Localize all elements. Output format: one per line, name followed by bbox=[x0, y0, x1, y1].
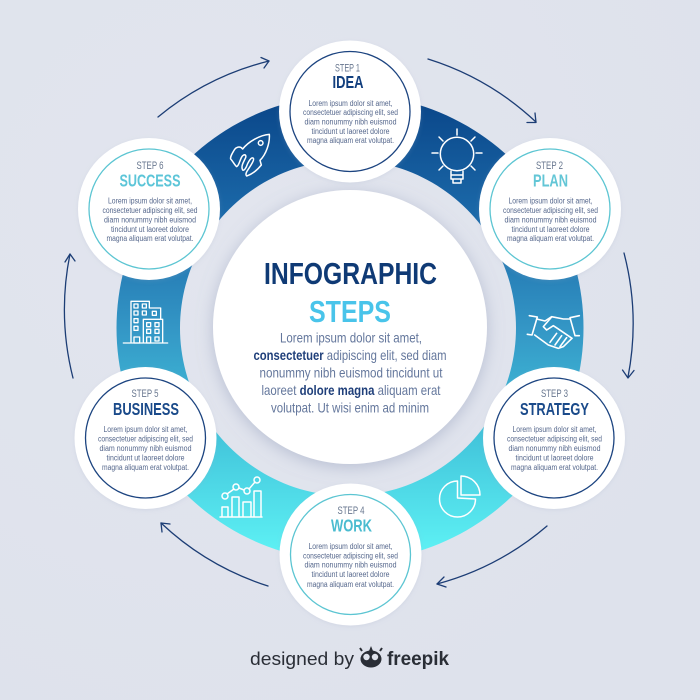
step 1: idea: consectetuer adipiscing elit, sed bbox=[303, 108, 398, 117]
icon: bar chart bbox=[220, 477, 262, 517]
footer credit bbox=[250, 646, 449, 670]
icon: building bbox=[123, 301, 168, 343]
step 2: plan: diam nonummy nibh euismod bbox=[504, 216, 596, 224]
step 1: idea: STEP 1 bbox=[335, 62, 360, 74]
step 5: business bbox=[74, 367, 216, 509]
icon: freepik logo bbox=[360, 646, 382, 668]
step 5: business: BUSINESS bbox=[113, 399, 179, 419]
step 2: plan: magna aliquam erat volutpat. bbox=[507, 234, 594, 243]
ring band bbox=[117, 94, 584, 561]
step 6: success bbox=[78, 138, 220, 280]
step 3: strategy: STEP 3 bbox=[541, 388, 568, 400]
step 3: strategy: diam nonummy nibh euismod bbox=[508, 444, 600, 453]
footer credit: designed by bbox=[250, 648, 355, 669]
center body text: Lorem ipsum dolor sit amet, bbox=[280, 330, 422, 346]
arrow: strategy to work bbox=[437, 526, 547, 587]
step 4: work: WORK bbox=[331, 516, 372, 536]
icon: rocket bbox=[231, 134, 269, 176]
step 1: idea: magna aliquam erat volutpat. bbox=[307, 136, 394, 145]
center body text bbox=[254, 330, 446, 416]
step 6: success: magna aliquam erat volutpat. bbox=[106, 234, 194, 243]
step 4: work bbox=[280, 484, 422, 626]
step 1: idea bbox=[279, 40, 421, 182]
step 3: strategy: magna aliquam erat volutpat. bbox=[511, 463, 598, 472]
arrow: work to business bbox=[161, 523, 268, 586]
step 5: business: tincidunt ut laoreet dolore bbox=[106, 454, 184, 462]
step 2: plan: consectetuer adipiscing elit, sed bbox=[503, 206, 598, 215]
step 3: strategy: tincidunt ut laoreet dolore bbox=[516, 454, 594, 462]
step 6: success: diam nonummy nibh euismod bbox=[104, 216, 196, 224]
step 5: business: diam nonummy nibh euismod bbox=[100, 444, 192, 453]
center body text: consectetuer adipiscing elit, sed diam bbox=[254, 348, 446, 363]
footer credit: freepik bbox=[387, 649, 449, 670]
step 4: work: Lorem ipsum dolor sit amet, bbox=[308, 542, 392, 551]
step 3: strategy: STRATEGY bbox=[520, 399, 589, 419]
icon: pie chart bbox=[440, 476, 480, 517]
step 6: success: STEP 6 bbox=[136, 160, 164, 172]
step 2: plan: PLAN bbox=[533, 170, 568, 190]
step 5: business: magna aliquam erat volutpat. bbox=[102, 463, 189, 472]
step 4: work: magna aliquam erat volutpat. bbox=[307, 580, 394, 589]
step 1: idea: IDEA bbox=[332, 72, 364, 92]
center body text: laoreet dolore magna aliquam erat bbox=[262, 383, 441, 398]
step 1: idea: Lorem ipsum dolor sit amet, bbox=[308, 99, 392, 108]
step 1: idea: diam nonummy nibh euismod bbox=[304, 118, 396, 126]
step 3: strategy: consectetuer adipiscing elit, sed bbox=[507, 434, 602, 444]
center body text: nonummy nibh euismod tincidunt ut bbox=[260, 366, 443, 380]
step 5: business: consectetuer adipiscing elit, sed bbox=[98, 434, 193, 444]
step 2: plan: tincidunt ut laoreet dolore bbox=[512, 225, 590, 234]
step 6: success: consectetuer adipiscing elit, sed bbox=[102, 206, 198, 215]
arrow: idea to plan bbox=[428, 59, 536, 122]
step 5: business: Lorem ipsum dolor sit amet, bbox=[104, 425, 188, 434]
center subtitle: STEPS bbox=[309, 294, 391, 329]
step 2: plan bbox=[479, 138, 621, 280]
arrow: plan to strategy bbox=[622, 253, 634, 378]
icon: handshake bbox=[527, 316, 579, 348]
step 4: work: STEP 4 bbox=[338, 505, 364, 517]
step 3: strategy: Lorem ipsum dolor sit amet, bbox=[512, 425, 596, 434]
step 5: business: STEP 5 bbox=[132, 388, 158, 400]
step 4: work: diam nonummy nibh euismod bbox=[304, 560, 396, 570]
icon: light bulb bbox=[432, 129, 482, 183]
step 6: success: SUCCESS bbox=[120, 170, 180, 190]
step 6: success: tincidunt ut laoreet dolore bbox=[111, 225, 189, 234]
step 4: work: tincidunt ut laoreet dolore bbox=[312, 570, 390, 579]
step 1: idea: tincidunt ut laoreet dolore bbox=[312, 127, 390, 136]
step 3: strategy bbox=[483, 367, 625, 509]
step 2: plan: STEP 2 bbox=[536, 160, 563, 172]
step 6: success: Lorem ipsum dolor sit amet, bbox=[108, 196, 192, 206]
step 2: plan: Lorem ipsum dolor sit amet, bbox=[508, 196, 592, 206]
arrow: success to idea bbox=[158, 58, 269, 117]
center panel bbox=[213, 190, 487, 464]
step 4: work: consectetuer adipiscing elit, sed bbox=[303, 552, 398, 560]
arrow: business to success bbox=[64, 254, 75, 378]
center body text: volutpat. Ut wisi enim ad minim bbox=[271, 400, 429, 416]
center title: INFOGRAPHIC bbox=[264, 256, 437, 291]
